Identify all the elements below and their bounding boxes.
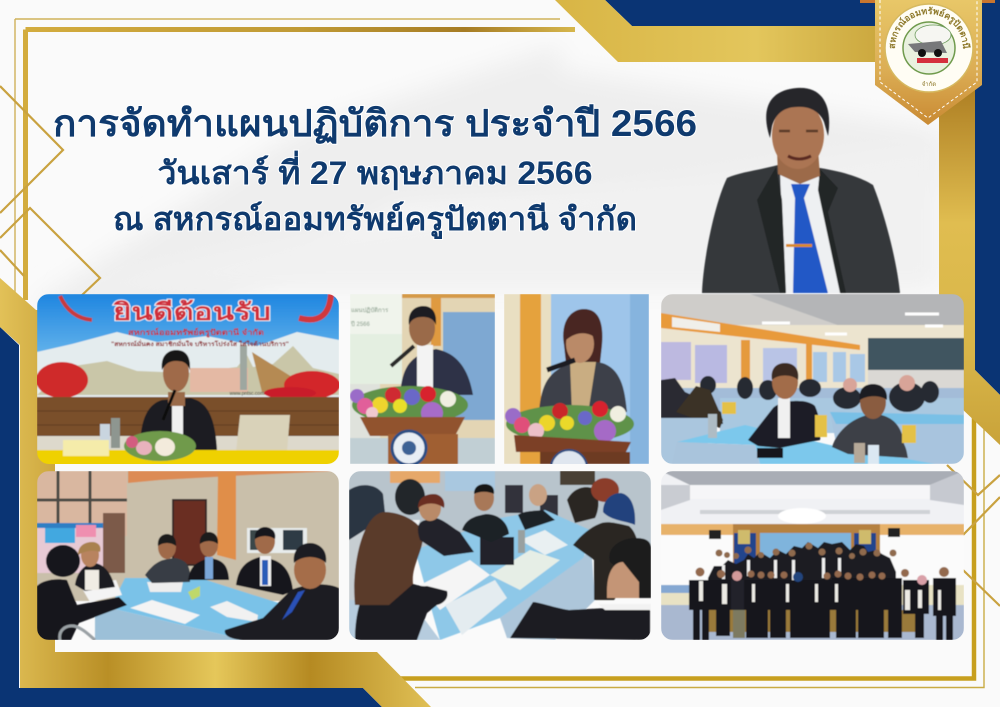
gold band right: [939, 75, 1000, 445]
yellow tablecloth: [37, 450, 339, 466]
speakers: [709, 530, 721, 539]
documents: [420, 560, 490, 610]
window area: [37, 471, 127, 536]
navy band left and bottom: [0, 327, 382, 707]
screen year: ปี 2566: [350, 320, 370, 328]
title line 1: การจัดทำแผนปฏิบัติการ ประจำปี 2566: [53, 103, 697, 144]
curtain: [443, 312, 495, 420]
door: [173, 500, 206, 565]
flowers: [352, 385, 468, 418]
navy corner band top right: [605, 0, 1000, 395]
badge with logo: [860, 0, 995, 125]
gold band left and bottom: [0, 278, 431, 707]
back row of people: [708, 542, 896, 602]
photo 2: male speaker at podium: [350, 294, 495, 465]
podium: [514, 435, 631, 452]
lapels: [757, 167, 786, 293]
ceiling: [661, 294, 964, 344]
man two: [832, 414, 908, 458]
front row of people: [689, 578, 956, 640]
man one: [748, 401, 820, 448]
table: [415, 510, 590, 640]
eyes and mouth: [779, 130, 818, 132]
portrait of chairman: [702, 88, 900, 293]
speaker: [400, 349, 473, 395]
logo seal: [884, 3, 974, 93]
projection screen: [350, 334, 403, 384]
back row people: [700, 376, 939, 412]
podium emblem: [550, 448, 588, 464]
right table: [830, 412, 964, 464]
man in foreground left: [37, 579, 127, 640]
back tables: [661, 388, 964, 418]
microphone: [547, 360, 575, 370]
podium: [360, 417, 465, 436]
bottle: [518, 530, 525, 553]
tie: [791, 184, 828, 293]
hair: [562, 308, 603, 364]
orange wall band: [661, 524, 964, 535]
podium emblem: [392, 431, 426, 465]
man four: [236, 557, 293, 595]
laptop: [236, 415, 290, 452]
microphone: [391, 346, 414, 366]
orange column: [520, 294, 541, 464]
women in background: [567, 487, 598, 523]
screen text: แผนปฏิบัติการ: [351, 306, 389, 314]
banner slogan: "สหกรณ์มั่นคง สมาชิกมั่นใจ บริหารโปร่งใส ใส่ใจด้านบริการ": [111, 339, 289, 348]
photo 1: welcome banner and speaker: [36, 294, 340, 466]
laptop: [480, 537, 514, 565]
man two: [145, 558, 190, 583]
banner background: [37, 294, 339, 352]
flowers: [124, 431, 196, 461]
photo 6: group working at tables: [349, 471, 651, 640]
photo 7: group photo on stage: [661, 471, 964, 640]
floor: [661, 605, 964, 640]
orange column: [431, 296, 441, 346]
ceiling: [661, 471, 964, 529]
wall: [380, 298, 495, 438]
bottles: [854, 443, 865, 463]
side walls: [661, 535, 964, 585]
chair: [60, 626, 95, 640]
hair: [766, 88, 829, 138]
foreground table top: [677, 425, 935, 464]
woman in hijab: [573, 522, 639, 600]
wall: [504, 294, 552, 464]
orange upper wall: [128, 471, 339, 483]
name stand: [188, 586, 200, 600]
face: [772, 101, 824, 169]
picture on wall: [247, 528, 307, 553]
tie clip: [786, 244, 812, 247]
man three: [188, 558, 229, 580]
banner subheading: สหกรณ์ออมทรัพย์ครูปัตตานี จำกัด: [128, 327, 264, 338]
neck: [777, 150, 820, 184]
man upper: [462, 514, 509, 542]
pennant: [875, 0, 982, 125]
bottles: [111, 418, 120, 448]
portraits: [738, 530, 750, 544]
bowing man: [518, 510, 555, 530]
table top: [110, 578, 285, 640]
ceiling lights: [762, 314, 943, 334]
banner heading: ยินดีต้อนรับ: [113, 299, 271, 326]
curtains: [661, 342, 691, 380]
photo 5: round-table meeting: [37, 471, 339, 640]
speaker: [140, 398, 217, 450]
left table: [661, 418, 708, 464]
seal name text: สหกรณ์ออมทรัพย์ครูปัตตานี: [890, 6, 971, 49]
photo 4: seated attendees in hall: [661, 294, 964, 464]
notice board: [37, 523, 125, 573]
nameplate: [63, 440, 109, 456]
wood wall: [37, 396, 339, 436]
side door: [103, 513, 125, 573]
banner buildings: [37, 346, 339, 395]
ribbon top: [860, 0, 995, 3]
foreground table skirt: [672, 442, 760, 464]
title line 3: venue: ณ สหกรณ์ออมทรัพย์ครูปัตตานี จำกัด: [113, 201, 637, 240]
flowers: [506, 405, 634, 443]
wall: [37, 471, 339, 601]
stage backdrop: [733, 524, 880, 582]
suit: [702, 165, 900, 293]
table skirt: [95, 606, 245, 640]
cannon: [908, 41, 947, 53]
background people: [349, 485, 386, 540]
chairman at right: [225, 584, 339, 640]
stitching: [880, 0, 977, 118]
diamond line ornaments left: [0, 86, 100, 297]
banner website: www.pntsc.com: [230, 391, 264, 397]
woman middle: [418, 518, 474, 556]
man foreground right: [510, 602, 650, 640]
title line 2: date: วันเสาร์ ที่ 27 พฤษภาคม 2566: [158, 150, 592, 191]
yellow chair sashes: [815, 415, 827, 437]
orange beam: [661, 313, 860, 350]
seal limited text: จำกัด: [922, 81, 936, 88]
gold band top right: [555, 0, 890, 62]
wall: [661, 325, 964, 395]
room background: [349, 471, 651, 551]
dark windows: [868, 338, 964, 370]
diamond line ornaments right: [947, 465, 1000, 606]
red flowers: [36, 362, 88, 398]
papers: [130, 600, 200, 624]
air conditioner: [672, 317, 720, 332]
woman foreground left: [355, 579, 448, 640]
banner ribbons: [60, 296, 92, 320]
title text block: [53, 103, 697, 240]
shirt: [780, 172, 845, 293]
microphone base: [757, 448, 783, 458]
floor: [350, 438, 495, 464]
microphone: [163, 390, 175, 420]
seated woman: [75, 563, 115, 591]
photo 3: female speaker at podium: [504, 294, 649, 464]
speaker: [539, 362, 627, 412]
orange column: [217, 472, 236, 560]
curtain: [550, 294, 631, 453]
